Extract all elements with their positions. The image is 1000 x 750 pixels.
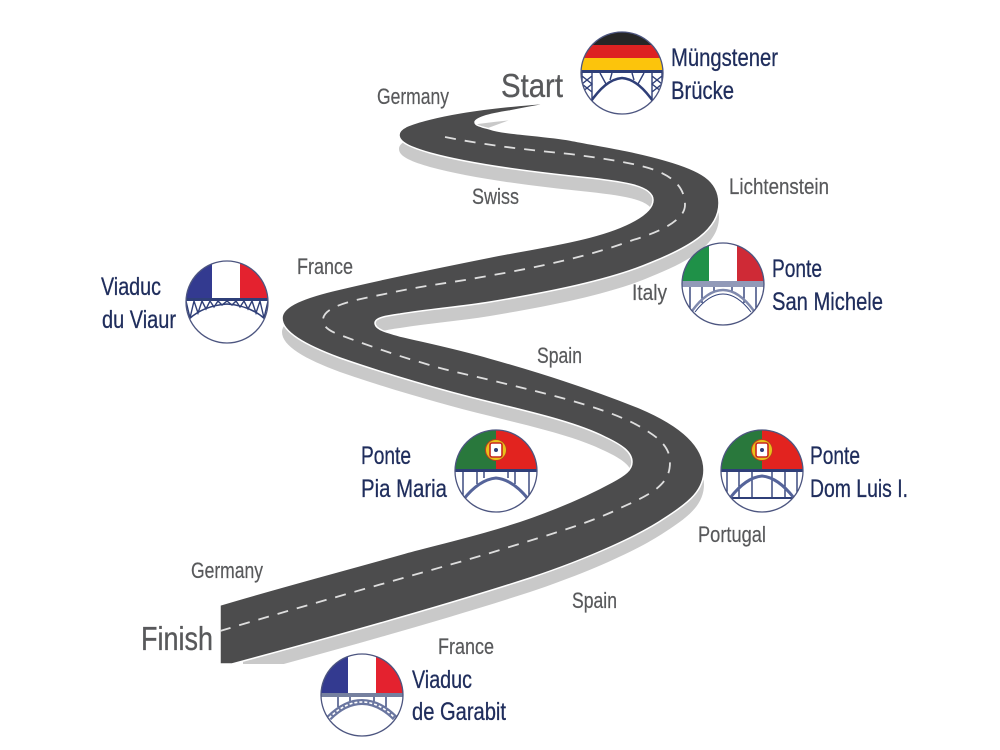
- road side wall: [220, 116, 719, 678]
- road centre dashes: [220, 137, 685, 631]
- name: Viaduc de Garabit: de Garabit: [412, 698, 506, 726]
- name: Ponte Dom Luis I.: [810, 442, 908, 503]
- label: Germany bottom: Germany: [191, 558, 263, 583]
- name: Ponte San Michele: Ponte: [772, 255, 822, 283]
- road surface: [220, 102, 719, 664]
- label: Italy: Italy: [632, 280, 667, 305]
- name: Ponte San Michele: San Michele: [772, 288, 883, 316]
- label: Start: Start: [501, 67, 563, 104]
- name: Ponte Pia Maria: Ponte: [361, 442, 411, 470]
- label: France upper: France: [297, 254, 353, 279]
- label: Swiss: Swiss: [472, 184, 519, 209]
- label: Spain lower: Spain: [572, 588, 617, 613]
- name: Viaduc du Viaur: du Viaur: [102, 306, 176, 334]
- badge: Portugal Ponte Pia Maria: [455, 430, 539, 512]
- label: Lichtenstein: Lichtenstein: [729, 174, 829, 199]
- badge: France Viaduc de Garabit: [320, 653, 404, 736]
- name: Müngstener Brücke: Müngstener: [671, 44, 778, 72]
- label: Finish: Finish: [141, 620, 213, 657]
- badge: Germany Müngstener Brücke: [580, 32, 664, 114]
- label: Germany top: Germany: [377, 84, 449, 109]
- badge: Italy Ponte San Michele: [682, 242, 766, 325]
- label: Portugal: Portugal: [698, 522, 766, 547]
- label: Spain upper: Spain: [537, 343, 582, 368]
- name: Ponte Pia Maria: [361, 442, 447, 503]
- badge: France Viaduc du Viaur: [185, 260, 269, 343]
- badge: Portugal Ponte Dom Luis I.: [721, 430, 805, 512]
- name: Ponte Dom Luis I.: Dom Luis I.: [810, 475, 908, 503]
- name: Ponte Pia Maria: Pia Maria: [361, 475, 447, 503]
- winding road: [220, 102, 719, 678]
- name: Viaduc de Garabit: [412, 666, 506, 726]
- name: Müngstener Brücke: [671, 44, 778, 105]
- name: Ponte San Michele: [772, 255, 883, 316]
- name: Viaduc du Viaur: Viaduc: [101, 273, 161, 301]
- name: Viaduc de Garabit: Viaduc: [412, 666, 472, 694]
- name: Viaduc du Viaur: [101, 273, 176, 334]
- label: France lower: France: [438, 634, 494, 659]
- name: Müngstener Brücke: Brücke: [671, 77, 734, 105]
- name: Ponte Dom Luis I.: Ponte: [810, 442, 860, 470]
